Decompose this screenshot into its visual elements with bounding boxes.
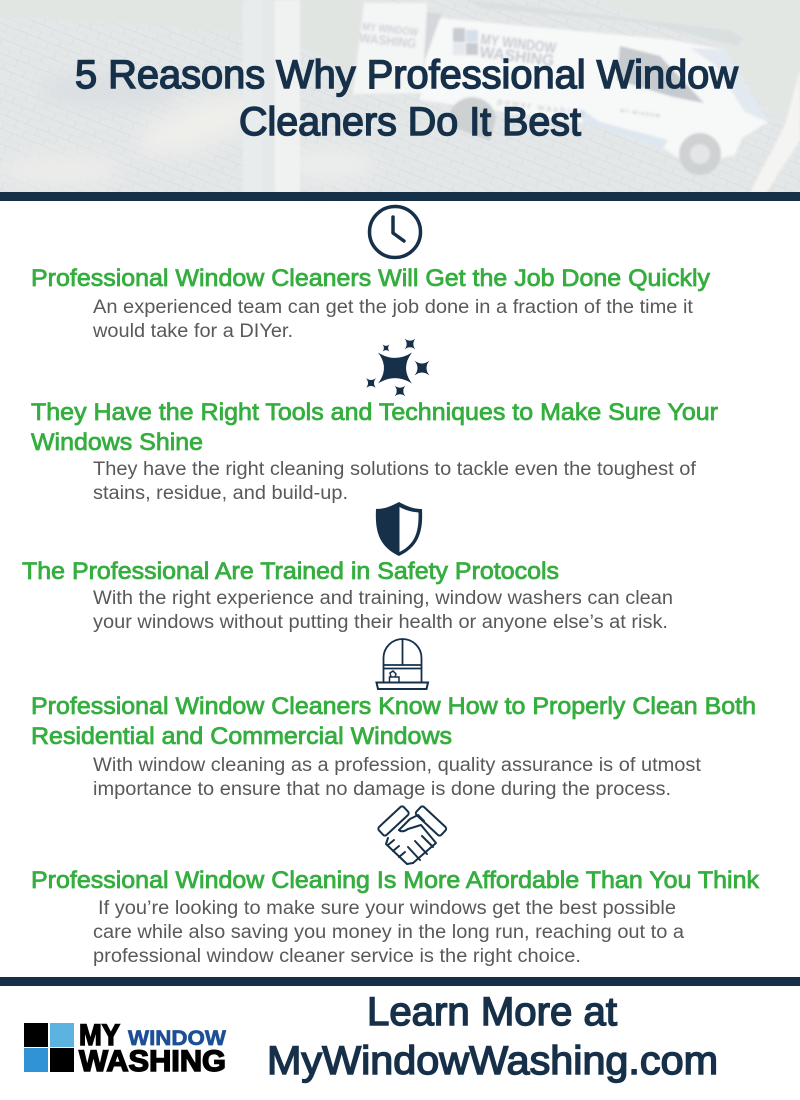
reason 4 text: importance to ensure that no damage is done during the process. — [93, 779, 671, 800]
reason 5 heading: Professional Window Cleaning Is More Affordable Than You Think — [31, 867, 760, 894]
icon: window — [376, 639, 428, 689]
reason 2 text — [93, 459, 697, 504]
logo: My Window Washing: WINDOW — [128, 1027, 226, 1050]
hero background: faded photo of van on driveway: WASHING — [479, 44, 555, 70]
reason 2 heading: Windows Shine — [31, 429, 203, 456]
icon: clock — [370, 206, 420, 258]
hero background: faded photo of van on driveway: power washing — [497, 96, 585, 118]
hero background: faded photo of van on driveway: MY WINDOW — [620, 108, 660, 120]
reason 5 text: If you’re looking to make sure your windows get the best possible — [98, 898, 676, 919]
reason 3 text — [93, 588, 673, 633]
van body — [420, 18, 768, 165]
reason 4 heading: Residential and Commercial Windows — [31, 723, 452, 750]
hero background: faded photo of van on driveway: MY WINDOW — [480, 31, 558, 57]
top divider bar — [0, 192, 800, 201]
reason 1 heading: Professional Window Cleaners Will Get the Job Done Quickly — [31, 265, 711, 292]
reason 5 text: care while also saving you money in the long run, reaching out to a — [93, 922, 684, 943]
bottom divider bar — [0, 977, 800, 986]
logo: My Window Washing — [24, 1019, 226, 1078]
reason 2 heading: They Have the Right Tools and Techniques to Make Sure Your — [31, 399, 718, 426]
hero background: faded photo of van on driveway — [0, 0, 800, 193]
title: Cleaners Do It Best — [239, 100, 581, 144]
reason 1 text: An experienced team can get the job done in a fraction of the time it — [93, 297, 694, 318]
reason 2 text: They have the right cleaning solutions to tackle even the toughest of — [93, 459, 697, 480]
reason 2 text: stains, residue, and build-up. — [93, 483, 348, 504]
call to action: MyWindowWashing.com — [267, 1039, 718, 1083]
hero background: faded photo of van on driveway: WASHING — [359, 30, 417, 51]
icon: handshake — [377, 805, 447, 864]
icon: sparkles — [366, 338, 430, 396]
reason 3 text: With the right experience and training, window washers can clean — [93, 588, 673, 609]
reason 1 text — [92, 297, 694, 342]
reason 3 heading: The Professional Are Trained in Safety Protocols — [22, 558, 559, 585]
call to action — [267, 990, 718, 1083]
title — [75, 53, 738, 144]
logo: My Window Washing: MY — [79, 1019, 120, 1052]
hero background: faded photo of van on driveway: MY WINDOW — [362, 21, 419, 39]
call to action: Learn More at — [367, 990, 617, 1034]
reason 4 heading: Professional Window Cleaners Know How to Properly Clean Both — [31, 693, 756, 720]
reason 4 heading — [31, 693, 756, 750]
van rear door — [353, 3, 427, 94]
reason 5 text: professional window cleaner service is the right choice. — [93, 946, 581, 967]
reason 3 text: your windows without putting their health or anyone else’s at risk. — [93, 612, 668, 633]
title: 5 Reasons Why Professional Window — [75, 53, 738, 97]
reason 5 text — [93, 898, 684, 967]
reason 4 text — [93, 755, 702, 800]
icon: shield — [376, 502, 422, 556]
logo: My Window Washing: WASHING — [79, 1045, 226, 1078]
reason 1 text: would take for a DIYer. — [92, 321, 293, 342]
reason 4 text: With window cleaning as a profession, quality assurance is of utmost — [93, 755, 702, 776]
reason 2 heading — [31, 399, 718, 456]
